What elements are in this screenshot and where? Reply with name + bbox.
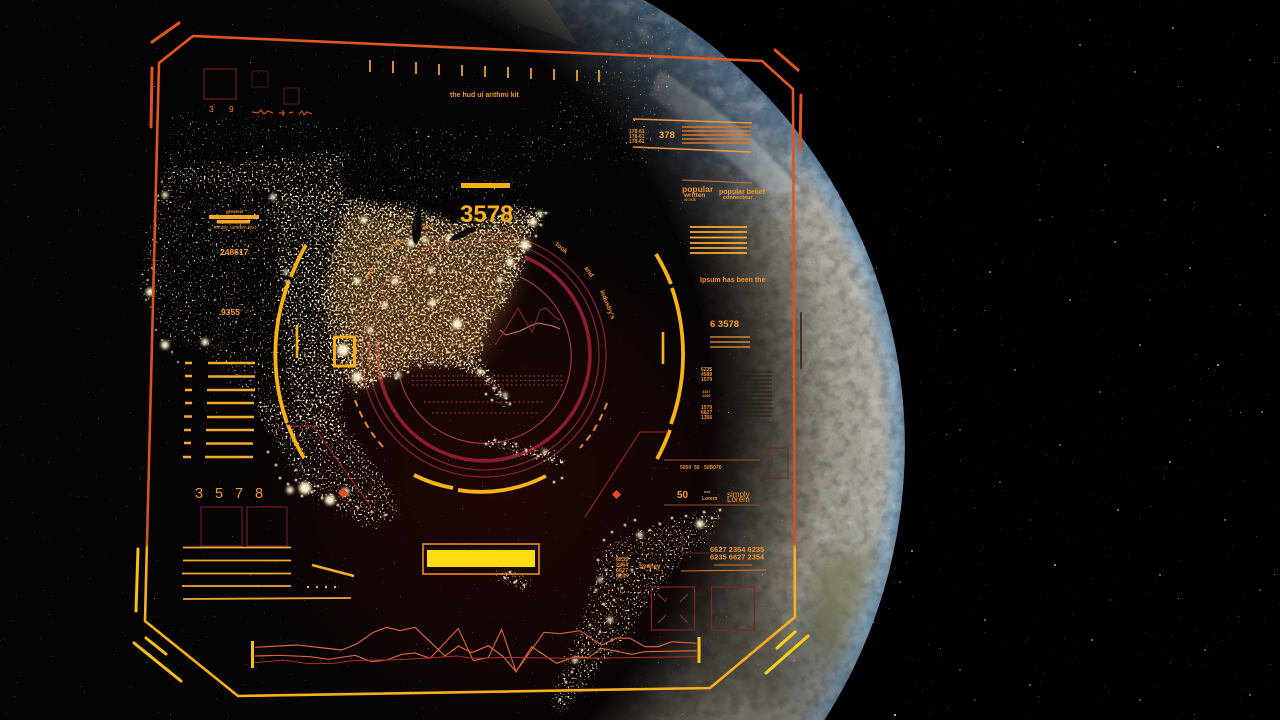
top-left squares and readouts [204,69,312,116]
city lights: bright metropolitan blobs [146,192,704,663]
sydney label: 6235 [616,574,628,580]
curved ring labels [365,223,616,321]
sydney label: 2354 [616,562,629,568]
lower-right readouts: Lorem [727,495,750,504]
lower-right readouts [664,448,788,505]
curved ring labels: type [365,266,376,279]
headline counter [460,183,513,228]
popular words block: words [684,197,697,202]
small number columns: 1356 [701,415,712,421]
radar dotted rows [412,376,562,413]
3 5 7 8 digits and squares [195,486,287,546]
sydney label: 6627 [616,568,628,574]
small number columns: 6627 [701,410,712,416]
popular words block: popular [682,184,714,194]
number grid and rule: 6235 6627 2354 [710,552,765,562]
lower-right readouts: 50 [694,465,700,471]
striped list block [690,227,747,253]
number grid and rule: 6627 2354 6235 [710,545,764,554]
curved ring labels: and [582,265,595,279]
upper-right data block [629,119,752,152]
small number columns: 4437 [702,390,710,394]
sydney label [616,557,661,580]
lower-right readouts: simply [727,490,750,499]
number grid and rule [681,535,766,571]
headline counter: 3578 [460,201,513,228]
popular words block [682,180,766,202]
ipsum caption: Ipsum has been the [700,277,765,284]
left label block [209,209,259,317]
3 5 7 8 digits and squares: 8 [255,486,263,502]
earth globe [30,0,905,720]
city lights: speckled land masses [135,5,730,720]
title text: the hud ui arithmi kit [450,92,520,99]
top-left squares and readouts: 3 [209,104,214,114]
bottom line chart [252,627,699,672]
corner ticks [134,23,808,681]
lower-right readouts: text [704,490,711,494]
outer gold arcs [275,245,683,492]
city lights: glow over the eastern states [330,210,530,390]
left label block: simply random text [214,225,257,231]
diagonal connectors and diamonds [290,426,668,517]
small number columns [701,367,712,421]
curved ring labels: took [554,241,569,256]
earth night side [30,60,874,623]
left label block: 248617 [220,247,249,257]
top tick ruler [370,60,599,82]
yellow progress box [423,544,539,574]
dim hatch box [735,372,772,416]
upper-right data block: 378 [659,130,675,141]
lower-right readouts: 50B070 [704,465,722,471]
popular words block: popular belief [719,189,766,196]
curved ring labels: industry's [598,289,616,321]
central radar rings [362,233,606,477]
small number columns: 1306 [702,394,710,398]
lower-left lines [182,548,354,599]
upper-right data block: 178-61 [629,139,645,145]
small number columns: 1579 [701,377,712,383]
hud frame [145,36,795,696]
radar mini chart [495,308,560,345]
lower-right readouts: 50 [677,490,689,501]
3 5 7 8 digits and squares: 7 [235,486,243,502]
left label block: greatest [226,209,244,214]
left label block: 9355 [221,307,240,317]
red tint over the night ocean [298,280,702,682]
6 3578 readout [710,319,750,347]
left list bars [183,363,255,457]
dashed arc segments [355,400,607,448]
curved ring labels: text [423,223,434,232]
great lakes [411,199,478,244]
earth day side [456,0,905,720]
6 3578 readout: 6 3578 [710,319,739,330]
small number columns: 6235 [701,367,712,373]
sydney label: Sydney [639,564,661,570]
3 5 7 8 digits and squares: 5 [215,486,223,502]
upper-right data block: 178-61 [629,134,645,140]
lower-right readouts: 5050 [680,465,691,471]
small number columns: 4589 [701,372,712,378]
small number columns: 1579 [701,405,712,411]
top-left squares and readouts: 9 [229,104,234,114]
curved ring labels: simply [386,238,404,254]
upper-right data block: 178-61 [629,129,645,135]
crossed square panels [652,587,754,630]
popular words block: connecteur [723,195,754,201]
lower-right readouts: Lorem [702,496,718,502]
3 5 7 8 digits and squares: 3 [195,486,203,502]
city lights: small bright clusters on coasts and metro corridors [146,182,720,700]
target marker [334,337,354,366]
popular words block: written [683,192,705,199]
sydney label: 6235 [616,557,628,563]
